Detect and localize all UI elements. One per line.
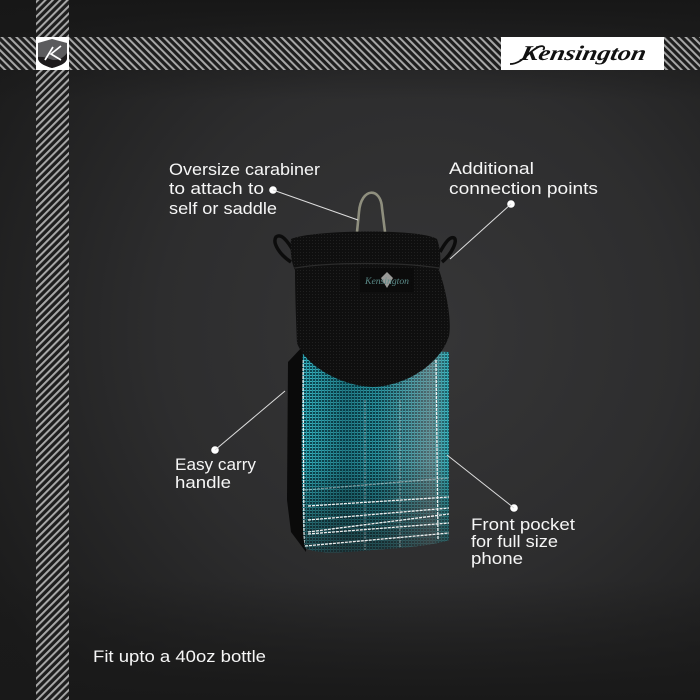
footnote: bottle capacity: Fit upto a 40oz bottle	[93, 648, 266, 666]
callout: front pocket	[447, 455, 575, 568]
callout: connection points	[449, 160, 598, 259]
horizontal hatched band	[0, 37, 700, 70]
callout: front pocket: phone	[471, 550, 523, 568]
callout: carabiner: self or saddle	[169, 200, 277, 218]
woven brand label	[360, 268, 414, 292]
product: bag with mesh pocket	[275, 193, 455, 555]
callout: carry handle	[175, 391, 285, 492]
callout: front pocket: Front pocket	[471, 516, 575, 534]
callout: connection points: connection points	[449, 180, 598, 198]
callout: carabiner: Oversize carabiner	[169, 161, 321, 179]
icon: K shield logo	[36, 37, 69, 70]
flap and neck	[291, 231, 450, 387]
neck shading	[295, 264, 439, 268]
mesh pocket	[300, 345, 452, 555]
carabiner	[357, 193, 385, 232]
logo: Kensington wordmark	[501, 37, 664, 70]
woven brand label: Kensington	[364, 276, 410, 286]
callout: carabiner: to attach to	[169, 180, 264, 198]
callout: connection points: Additional	[449, 160, 534, 178]
logo: Kensington wordmark: Kensington	[517, 41, 649, 65]
callout: carry handle: Easy carry	[175, 456, 257, 474]
vertical hatched band	[36, 0, 69, 700]
callout: carry handle: handle	[175, 474, 231, 492]
callout: carabiner	[169, 161, 358, 220]
callout: front pocket: for full size	[471, 533, 558, 551]
back panel / handle	[287, 345, 312, 552]
connection loops	[275, 236, 294, 262]
